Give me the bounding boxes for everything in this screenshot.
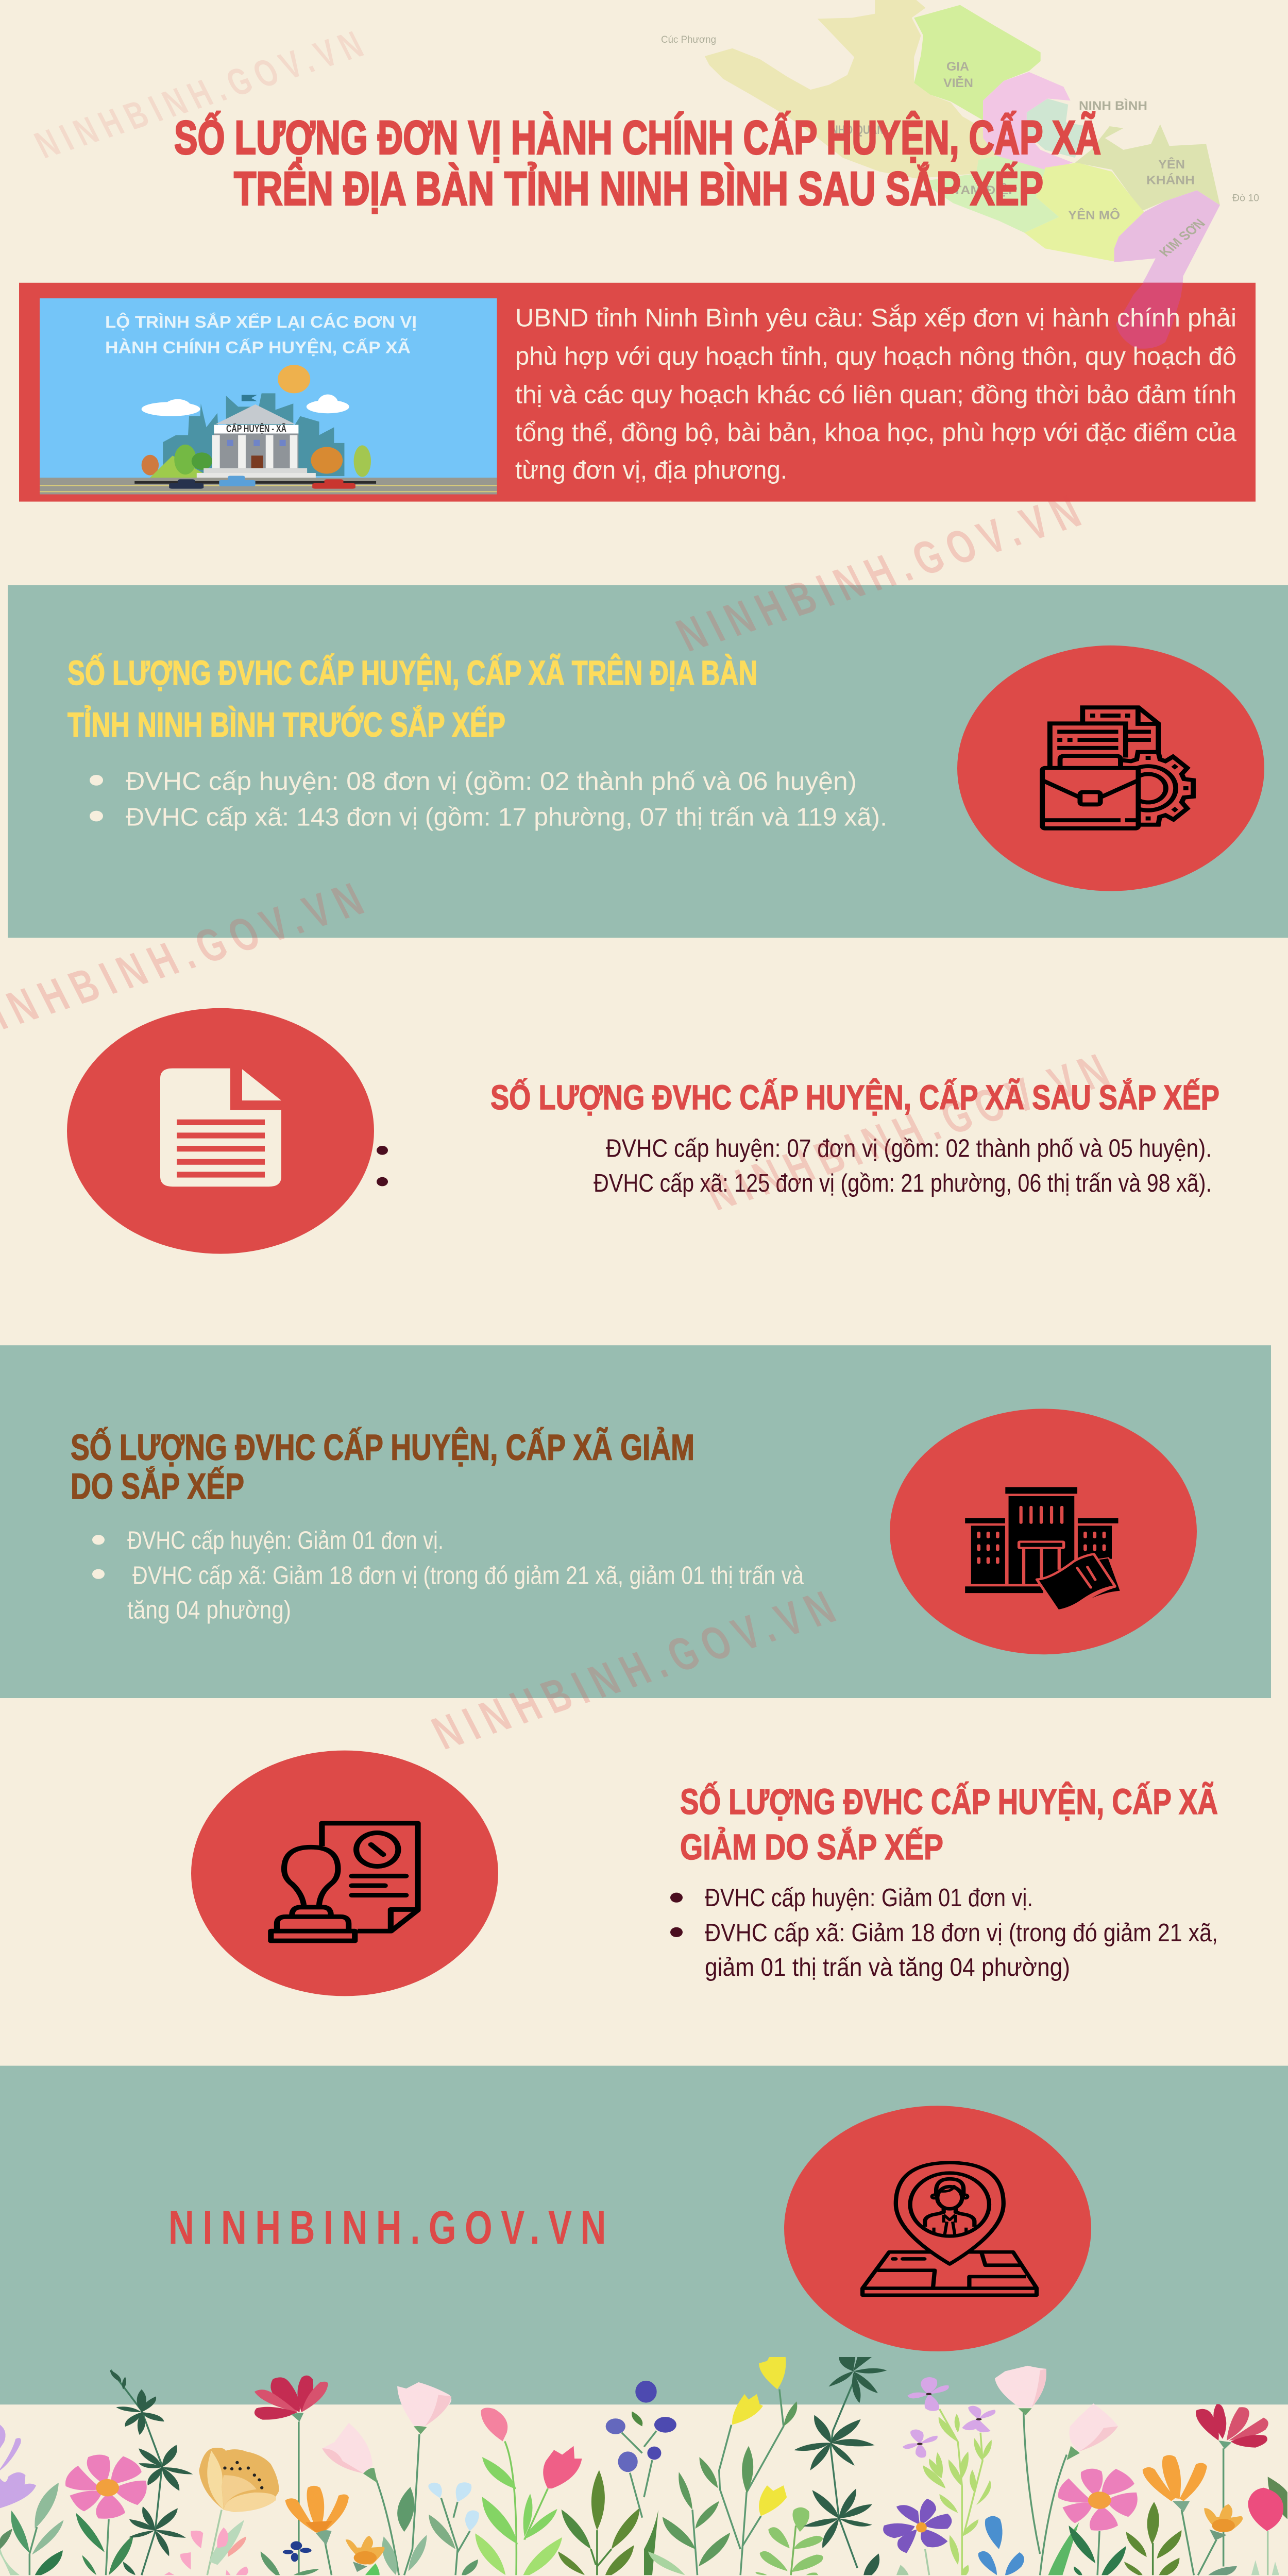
flower garden illustration: right half xyxy=(635,2357,1287,2575)
heading xyxy=(67,653,757,744)
watermark: section three: NINHBINH.GOV.VN xyxy=(424,1579,851,1759)
lilac flower xyxy=(0,2425,36,2508)
illustration: district and commune building: CẤP HUYỆN - XÃ xyxy=(226,423,286,434)
heading: SỐ LƯỢNG ĐVHC CẤP HUYỆN, CẤP XÃ GIẢM xyxy=(71,1427,694,1468)
map labels: VIỄN xyxy=(943,76,973,90)
green leaves near daisy xyxy=(1048,2477,1287,2575)
bullet list xyxy=(377,1134,1212,1197)
intro text xyxy=(515,303,1237,484)
bullet list xyxy=(90,767,887,831)
watermark: section one upper: NINHBINH.GOV.VN xyxy=(668,483,1096,662)
pale pink tulips xyxy=(995,2366,1118,2460)
panel: after rearrangement xyxy=(67,1008,1219,1254)
map labels xyxy=(661,34,1259,259)
red circle xyxy=(67,1008,374,1254)
panel: intro xyxy=(19,283,1256,502)
illustration: district and commune building xyxy=(40,298,497,494)
title xyxy=(174,111,1101,215)
red circle xyxy=(957,646,1264,891)
watermark: section two: NINHBINH.GOV.VN xyxy=(697,1042,1125,1221)
map labels: NHO QUAN xyxy=(831,123,884,137)
bullet list: ĐVHC cấp huyện: 08 đơn vị (gồm: 02 thành phố và 06 huyện) xyxy=(126,767,857,795)
orange crocus xyxy=(285,2486,349,2545)
hot pink tulip xyxy=(1248,2488,1283,2531)
bullet list: ĐVHC cấp huyện: Giảm 01 đơn vị. xyxy=(127,1526,444,1554)
icon: document xyxy=(160,1069,281,1187)
map labels: NINH BÌNH xyxy=(1079,98,1147,112)
illustration: district and commune building: HÀNH CHÍNH CẤP HUYỆN, CẤP XÃ xyxy=(105,338,411,357)
pink daisy xyxy=(1058,2469,1138,2531)
heading xyxy=(71,1427,694,1506)
heading: GIẢM DO SẮP XẾP xyxy=(680,1826,943,1867)
pink bud xyxy=(481,2408,507,2442)
heading: TỈNH NINH BÌNH TRƯỚC SẮP XẾP xyxy=(67,705,505,744)
panel: reduction repeated xyxy=(191,1751,1218,1996)
map region: Tam Diep xyxy=(921,156,1059,233)
watermark: top left: NINHBINH.GOV.VN xyxy=(28,21,376,166)
lilac flowers xyxy=(903,2377,995,2458)
bullet list xyxy=(92,1526,804,1624)
pale pink tulips xyxy=(322,2382,451,2483)
map labels: KHÁNH xyxy=(1146,173,1195,187)
panel: before rearrangement xyxy=(8,585,1288,938)
map labels: Đò 10 xyxy=(1232,192,1259,204)
flower stems xyxy=(29,2370,642,2575)
pink daisy xyxy=(65,2454,147,2519)
hot pink tulip xyxy=(543,2446,582,2488)
golden poppy xyxy=(199,2448,279,2512)
map region: Gia Vien xyxy=(914,5,1041,121)
map labels: KIM SƠN xyxy=(1156,216,1209,259)
map labels: TAM ĐIỆP xyxy=(953,183,1018,197)
bullet list: ĐVHC cấp huyện: Giảm 01 đơn vị. xyxy=(705,1883,1033,1912)
red flower xyxy=(1196,2404,1268,2449)
clover leaves xyxy=(756,2507,823,2575)
red circle xyxy=(890,1409,1197,1654)
map region: Hoa Lu xyxy=(983,72,1073,173)
lime leaves xyxy=(923,2414,992,2575)
blueberries xyxy=(635,2381,676,2460)
bullet list: giảm 01 thị trấn và tăng 04 phường) xyxy=(705,1953,1070,1981)
map labels: GIA xyxy=(946,59,969,73)
bullet list: ĐVHC cấp xã: 143 đơn vị (gồm: 17 phường, 07 thị trấn và 119 xã). xyxy=(126,802,887,831)
map labels: YÊN MÔ xyxy=(1068,208,1120,222)
map region: Yen Khanh xyxy=(1075,124,1220,211)
light blue buds xyxy=(428,2482,479,2531)
leaves xyxy=(644,2401,909,2575)
map region: Yen Mo xyxy=(1024,163,1144,262)
panel: footer xyxy=(0,2066,1288,2404)
leaves xyxy=(0,2411,642,2575)
bullet list xyxy=(670,1883,1218,1981)
panel: reduction xyxy=(0,1345,1271,1698)
bullet list: ĐVHC cấp xã: Giảm 18 đơn vị (trong đó giảm 21 xã, giảm 01 thị trấn và xyxy=(132,1561,804,1589)
red flower xyxy=(255,2376,328,2421)
small orange flower xyxy=(1204,2504,1243,2540)
small pink buds xyxy=(164,2528,248,2575)
map labels: Cúc Phương xyxy=(661,34,716,45)
map of Ninh Binh province xyxy=(661,0,1259,309)
bullet list: tăng 04 phường) xyxy=(127,1596,291,1624)
heading xyxy=(680,1781,1218,1867)
dark star leaves xyxy=(794,2357,887,2548)
map region: Kim Son xyxy=(1114,190,1220,309)
website label: NINHBINH.GOV.VN xyxy=(168,2201,615,2255)
purple daisy xyxy=(883,2499,952,2553)
icon: briefcase, documents and gear xyxy=(1042,707,1193,828)
heading: DO SẮP XẾP xyxy=(71,1466,244,1506)
icon: map pin with person xyxy=(862,2163,1037,2295)
small orange flower xyxy=(346,2536,384,2572)
red circle xyxy=(191,1751,498,1996)
illustration: district and commune building: LỘ TRÌNH SẮP XẾP LẠI CÁC ĐƠN VỊ xyxy=(105,312,417,331)
yellow flowers xyxy=(732,2357,787,2516)
dark star leaves xyxy=(110,2370,193,2556)
intro text: từng đơn vị, địa phương. xyxy=(515,455,787,484)
map region: Ninh Binh city xyxy=(1027,98,1087,158)
blue leaves xyxy=(978,2516,1024,2575)
small dark blue flower xyxy=(283,2541,312,2562)
flower garden illustration: left half xyxy=(0,2370,642,2575)
flower stems xyxy=(644,2382,1268,2575)
heading: SỐ LƯỢNG ĐVHC CẤP HUYỆN, CẤP XÃ TRÊN ĐỊA BÀN xyxy=(67,653,757,692)
icon: office building with papers xyxy=(965,1487,1121,1611)
map tail overlapping the panel xyxy=(1116,283,1183,349)
orange crocus xyxy=(1143,2455,1207,2512)
icon: stamp and document xyxy=(271,1823,418,1941)
map labels: YÊN xyxy=(1158,157,1185,172)
map region: Nho Quan xyxy=(705,0,997,178)
red circle xyxy=(784,2106,1091,2351)
blueberries xyxy=(606,2418,638,2472)
